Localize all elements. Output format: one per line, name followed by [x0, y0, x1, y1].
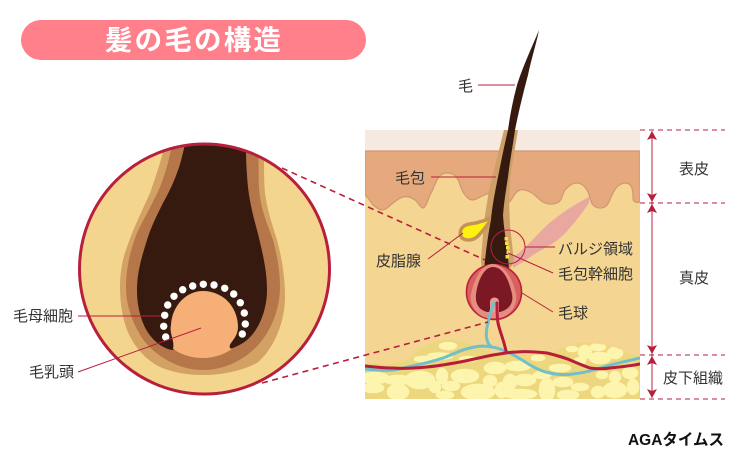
label: bulge region: [525, 241, 633, 258]
sebaceous gland: [460, 216, 493, 240]
outer sheath: [120, 140, 285, 375]
panel: enlarged hair bulb: [80, 140, 330, 394]
fat layer: [365, 340, 640, 399]
follicle sheath: [481, 130, 518, 272]
label: hair bulb: [522, 293, 588, 322]
dermis background: [365, 174, 640, 364]
hair shaft: [484, 30, 539, 270]
blood vessels: [365, 303, 640, 375]
label: follicle stem cells: 毛包幹細胞: [558, 266, 633, 283]
label: dermal papilla: [29, 328, 201, 381]
label: subcutaneous tissue: 皮下組織: [663, 370, 723, 387]
dermal papilla: [171, 291, 238, 358]
label: dermis: 真皮: [679, 269, 709, 287]
label: follicle: 毛包: [395, 170, 425, 187]
panel: skin layers: [365, 130, 640, 364]
label: bulge region: バルジ領域: [558, 241, 633, 258]
label: hair: 毛: [458, 78, 473, 95]
panel: fat and vessels: [362, 264, 640, 401]
bulge circle: [491, 230, 525, 264]
label: sebaceous gland: 皮脂腺: [376, 253, 421, 270]
label: sebaceous gland: [376, 233, 463, 270]
matrix cells: [160, 281, 249, 341]
label: follicle: [395, 170, 496, 187]
title banner: [21, 20, 366, 60]
hair root: [137, 140, 267, 350]
label: matrix cells: 毛母細胞: [13, 308, 73, 325]
title banner: 髪の毛の構造: [105, 24, 283, 56]
label: dermal papilla: 毛乳頭: [29, 364, 74, 381]
arrector muscle: [512, 197, 589, 268]
inner sheath: [126, 140, 280, 370]
surface layer: [365, 130, 640, 151]
stem cells: [504, 237, 510, 258]
label: epidermis: 表皮: [679, 161, 709, 178]
label: hair: [458, 78, 515, 95]
label: hair bulb: 毛球: [558, 305, 588, 322]
label: follicle stem cells: [508, 253, 633, 283]
logo: AGAタイムス: [628, 431, 724, 449]
layer scale: [640, 130, 725, 399]
zoom dashed lines: [262, 168, 488, 383]
hair bulb: [466, 264, 522, 320]
epidermis: [365, 151, 640, 210]
